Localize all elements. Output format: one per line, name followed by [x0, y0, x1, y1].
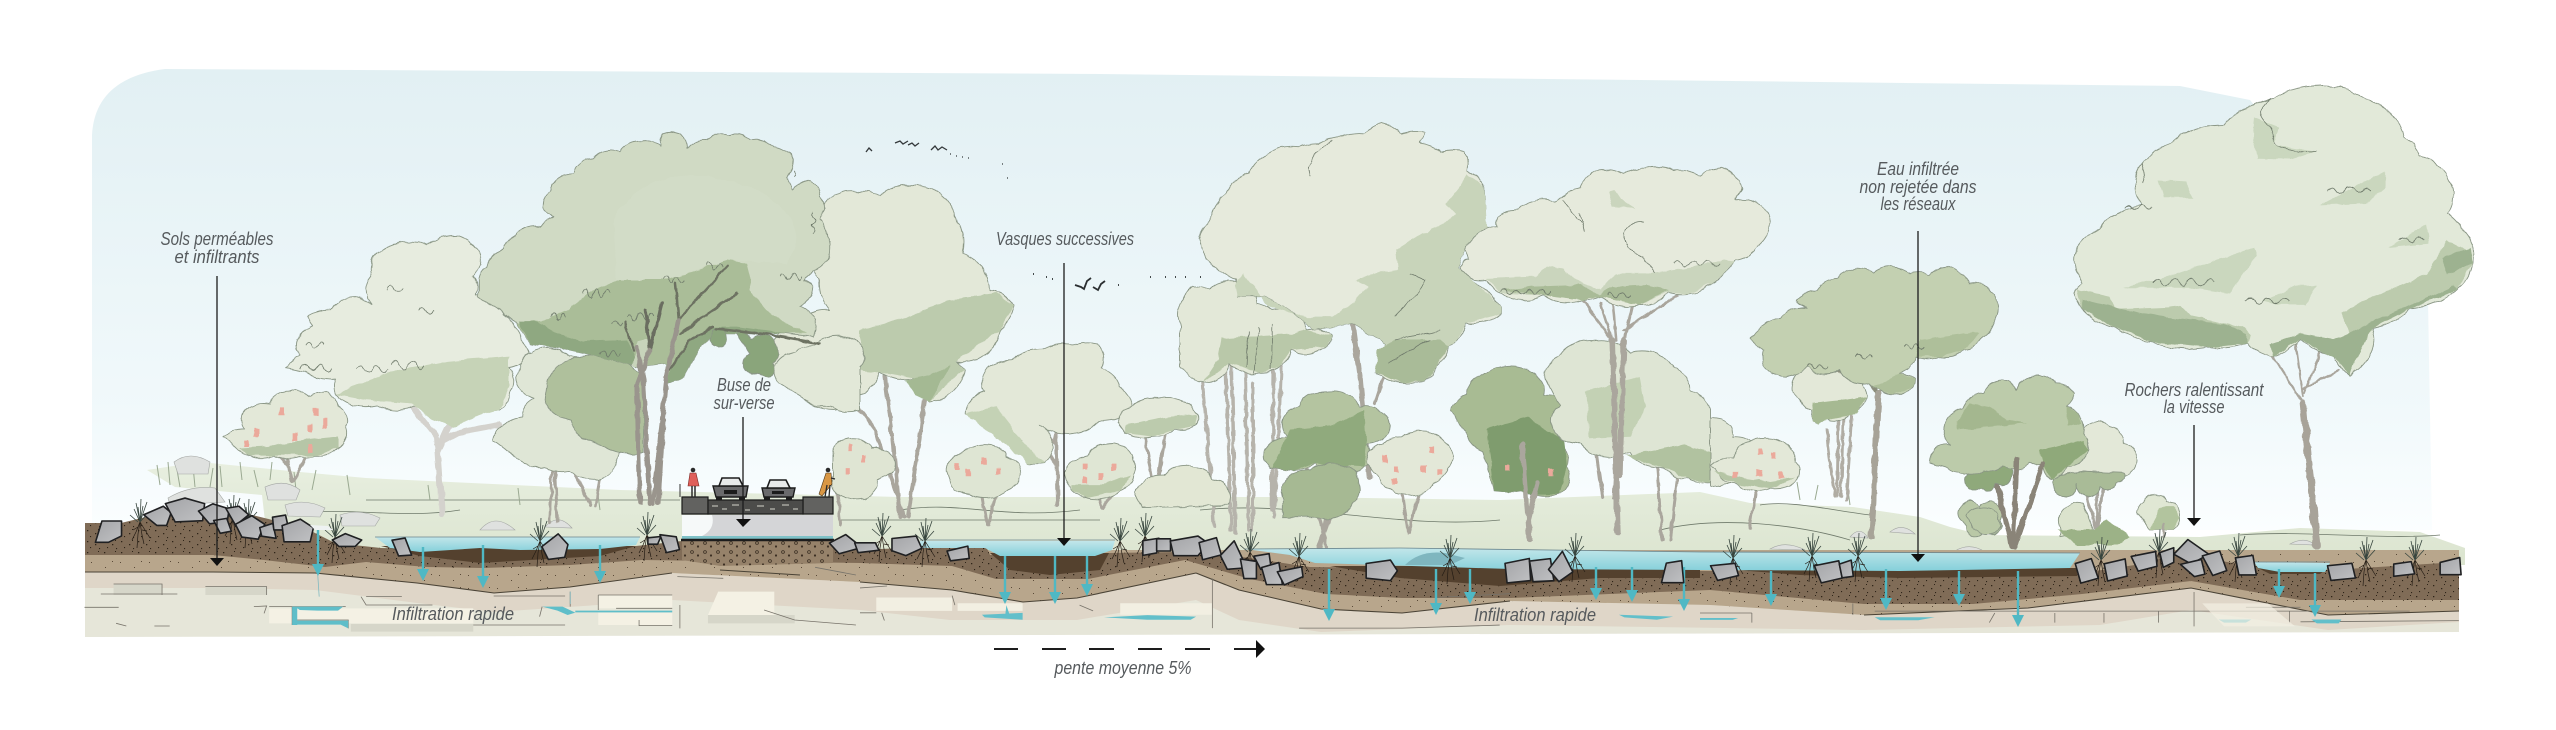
tree: mid dark tree right: [1451, 366, 1577, 540]
panel 1 trees: [223, 236, 865, 523]
panel 1b: [832, 438, 894, 525]
callout: eau infiltrée: les réseaux: [1880, 194, 1956, 214]
fruit shrub 1: [947, 444, 1021, 525]
tree: pale tree behind umbrella: [1545, 340, 1710, 540]
tree: small fruit tree left: [223, 391, 347, 481]
tree: behind group with tall trunks: [1178, 281, 1333, 533]
small pale shrub: [2137, 495, 2180, 537]
tree: pale tree left: [287, 236, 529, 513]
callout: rochers: Rochers ralentissant: [2124, 380, 2264, 400]
callout: buse de sur-verse: [714, 375, 774, 527]
soil strata: [84, 511, 2459, 637]
meadow ground: [147, 456, 2465, 565]
tree: medium green tree: [1750, 267, 1998, 537]
water basins: [375, 537, 2330, 572]
road deck: [682, 497, 833, 514]
tree: pale mid tree with lower lobe: [494, 348, 619, 523]
submerged boulders: [1405, 552, 1465, 565]
callout: sols perméables: et infiltrants: [174, 247, 260, 267]
callout: sols perméables: [160, 229, 274, 566]
callout: rochers: la vitesse: [2164, 397, 2224, 417]
sky background: [92, 69, 2432, 530]
fruit shrub 2: [1065, 442, 1136, 508]
pale boulder shrub: [2057, 502, 2130, 545]
grass tufts and roots: [130, 495, 2425, 586]
person right: [819, 468, 835, 497]
dark layer under basins: [381, 546, 2330, 586]
gravel under culvert: [682, 541, 833, 566]
car 2: [762, 480, 795, 500]
callout: sols perméables: Sols perméables: [160, 229, 274, 249]
rocks: [95, 498, 2461, 585]
panel 2 trees: [947, 340, 1756, 548]
small shrub: [1958, 501, 2002, 537]
callout: vasques successives: Vasques successives: [996, 229, 1134, 249]
tree: pale small tree: [2053, 421, 2137, 533]
tree: mid green lobe behind: [545, 355, 644, 454]
slope arrow: [994, 640, 1265, 658]
label: infiltration rapide left: Infiltration rapide: [392, 604, 514, 624]
fruit tree near road: [832, 438, 894, 525]
culvert concrete: [682, 515, 833, 540]
pale meadow boulders: [168, 456, 2315, 552]
callout: buse de sur-verse: sur-verse: [714, 393, 774, 413]
small shrub: [1967, 508, 2000, 535]
callout: buse de sur-verse: Buse de: [717, 375, 771, 395]
label: pente moyenne: pente moyenne 5%: [1054, 658, 1192, 678]
tree: umbrella pine: [1459, 167, 1770, 533]
pink beige layer: [85, 572, 2459, 632]
panel 5: group and large pale tree: [1178, 123, 1501, 533]
tan layer: [85, 550, 2459, 615]
panel 6: mid right trees: [1750, 267, 2180, 547]
tree: pale canopy behind large tree: [770, 185, 1014, 517]
label: infiltration rapide right: Infiltration rapide: [1474, 605, 1596, 625]
tree: small umbrella: [1117, 397, 1198, 483]
birds group 1: [866, 141, 1008, 178]
stone slabs: [84, 567, 856, 632]
tan and bedrock outlines: [85, 570, 2459, 615]
callout: eau infiltrée: non rejetée dans: [1860, 177, 1976, 197]
lower right pale lobe: [1710, 418, 1756, 487]
car 1: [713, 478, 748, 500]
tree: dark canopy tree: [1930, 375, 2088, 547]
person left: [680, 468, 699, 497]
tree: vasque tree: [966, 344, 1131, 506]
pale shrub: [1136, 465, 1231, 508]
callout: eau infiltrée: Eau infiltrée: [1877, 159, 1959, 179]
tree: large pale tree centre: [1199, 123, 1501, 477]
birds group 2: [1033, 274, 1201, 290]
road and culvert: [680, 468, 835, 566]
tree: behind mid tree: [1792, 366, 1867, 500]
fruit shrub 3: [1367, 431, 1453, 532]
trees and vegetation: [223, 86, 2473, 548]
fruit shrub 4: [1711, 438, 1800, 529]
tree: large green tree: [478, 132, 830, 503]
panel 3 trees: [1711, 86, 2473, 546]
callout: rochers: [2124, 380, 2264, 526]
infiltration arrows: [312, 530, 2321, 627]
tree: dark green tree centre: [1264, 390, 1390, 548]
callout: eau infiltrée: [1860, 159, 1976, 562]
callout: vasques successives: [996, 229, 1134, 546]
stone bedrock layer: [85, 565, 2459, 637]
topsoil layer: [85, 511, 2459, 604]
large tree right: [2074, 86, 2473, 546]
shrub lobes centre-right of big tree: [774, 336, 865, 412]
